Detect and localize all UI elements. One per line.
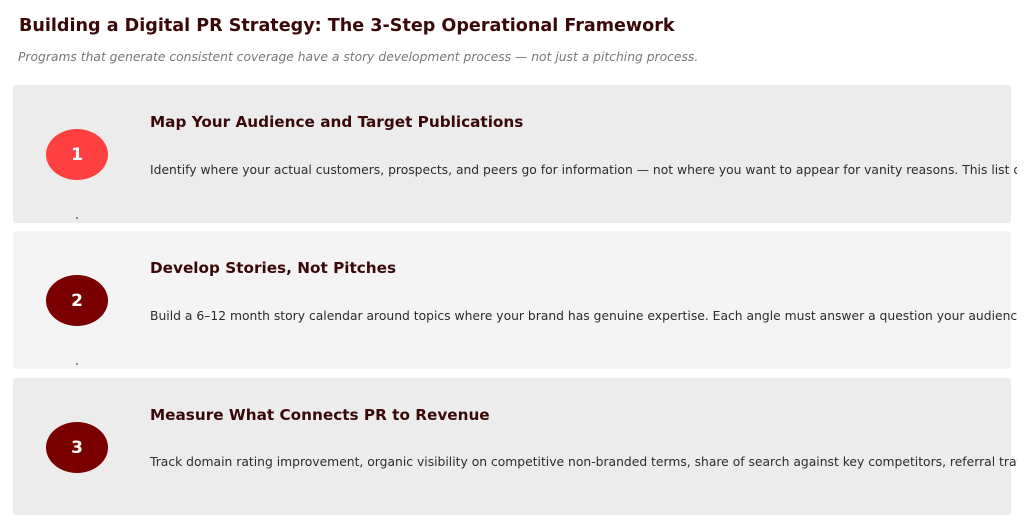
- panel: step 2: [46, 259, 1017, 365]
- panel: card background step 2: [13, 231, 1011, 369]
- connector dot: step 1: [76, 217, 78, 219]
- icon: number badge 2: [46, 275, 108, 326]
- heading: step 1: Map Your Audience and Target Publications: [150, 113, 523, 131]
- icon: number badge 1: [46, 129, 108, 180]
- icon: number badge 2: 2: [71, 291, 83, 311]
- connector dot: step 2: [76, 363, 78, 365]
- panel: card background step 1: [13, 85, 1011, 223]
- icon: number badge 1: 1: [71, 145, 83, 165]
- panel: step 3: [46, 406, 1017, 473]
- heading: step 2: Develop Stories, Not Pitches: [150, 259, 396, 277]
- icon: number badge 3: [46, 422, 108, 473]
- panel: step 1: [46, 113, 1017, 219]
- title: Building a Digital PR Strategy: The 3-Step Operational Framework: [19, 16, 675, 36]
- heading: step 3: Measure What Connects PR to Revenue: [150, 406, 490, 424]
- panel: card background step 3: [13, 378, 1011, 515]
- icon: number badge 3: 3: [71, 438, 83, 458]
- subtitle: Programs that generate consistent coverage have a story development process — not just a pitching process.: [18, 50, 698, 64]
